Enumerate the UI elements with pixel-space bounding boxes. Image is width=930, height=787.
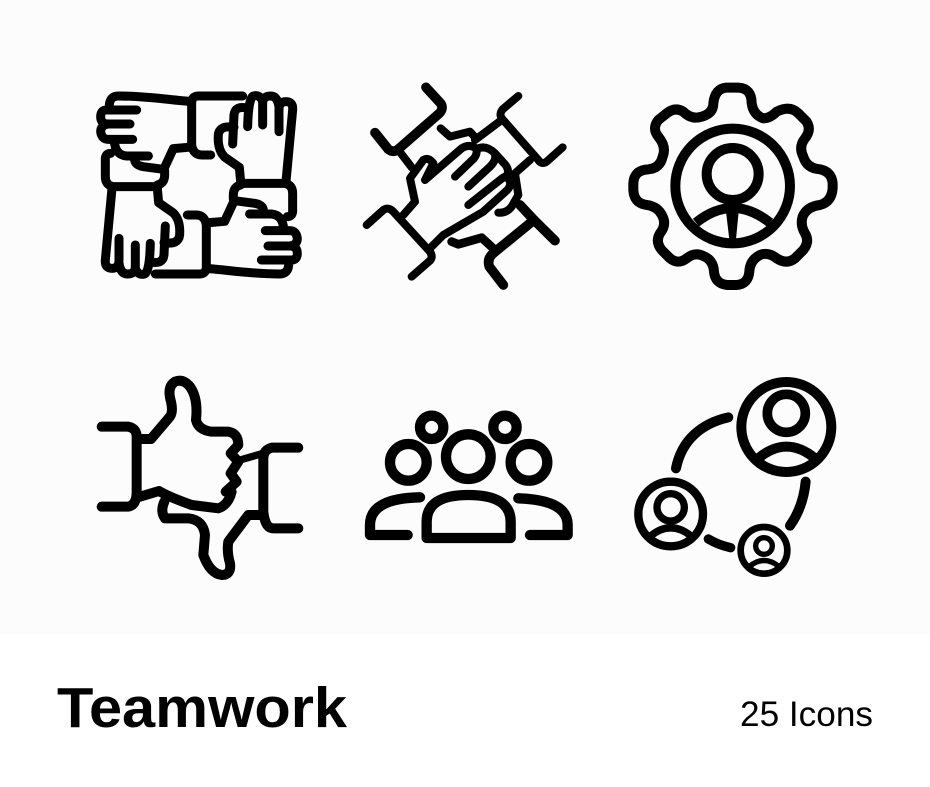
icon: four linked hands [101, 96, 297, 274]
icon: thumbs up and thumbs down [102, 381, 298, 575]
title: Teamwork [57, 676, 347, 740]
icon count label: 25 Icons [740, 695, 873, 734]
icon: connected people network [638, 382, 831, 574]
icon: stacked hands [367, 87, 563, 285]
icon: team group [370, 416, 568, 538]
gear outline [633, 88, 833, 285]
icon: gear with person [633, 88, 833, 285]
